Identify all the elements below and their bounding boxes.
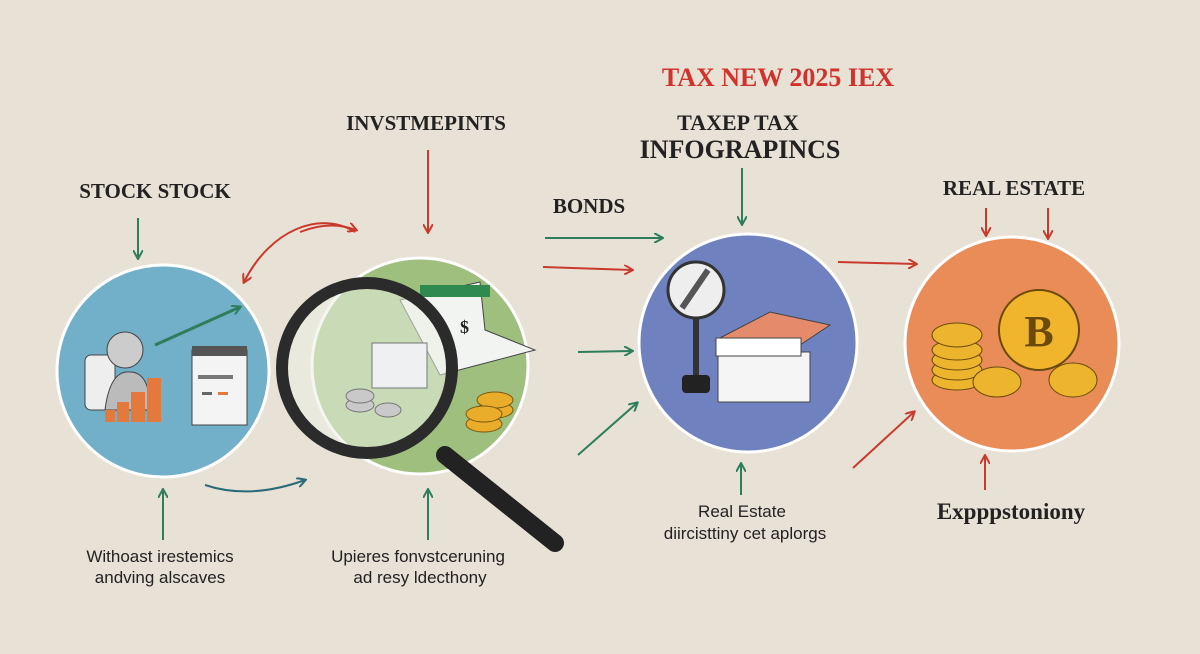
icon: bill: $ (460, 317, 469, 337)
subtitle: TAXEP TAX (677, 110, 799, 135)
icon: document box (192, 346, 247, 425)
heading: bonds: BONDS (553, 194, 625, 218)
text: investments caption: ad resy ldecthony (353, 568, 487, 587)
text: investments caption: Upieres fonvstceruning (331, 547, 505, 566)
icon: bitcoin: B (1024, 307, 1054, 356)
text: bonds caption: diircisttiny cet aplorgs (664, 524, 826, 543)
icon: bitcoin (999, 290, 1079, 370)
icon: magnifying glass (282, 283, 555, 543)
subtitle: INFOGRAPINCS (640, 135, 840, 164)
icon: compass stand (668, 262, 724, 393)
icon: person with chart (85, 307, 240, 422)
heading: stock: STOCK STOCK (79, 179, 231, 203)
heading: investments: INVSTMEPINTS (346, 111, 506, 135)
icon: books stack (716, 312, 830, 402)
text: stock caption: Withoast irestemics (86, 547, 234, 566)
text: real estate caption: Expppstoniony (937, 499, 1086, 524)
icon: gold coins (466, 392, 513, 432)
icon: bill (400, 282, 535, 375)
title: red: TAX NEW 2025 IEX (662, 63, 894, 92)
arrows (138, 150, 1048, 540)
text: stock caption (86, 547, 234, 587)
panel: stock circle (57, 265, 269, 477)
panel: bonds circle (639, 234, 857, 452)
text: stock caption: andving alscaves (95, 568, 225, 587)
subtitle (640, 110, 840, 164)
icon: coins (973, 363, 1097, 397)
text: investments caption (331, 547, 505, 587)
panel: real estate circle (905, 237, 1119, 451)
heading: real estate: REAL ESTATE (943, 176, 1085, 200)
panel: investments circle (312, 258, 535, 474)
text: bonds caption (664, 502, 826, 543)
icon: coin stack (932, 323, 982, 390)
text: bonds caption: Real Estate (698, 502, 786, 521)
